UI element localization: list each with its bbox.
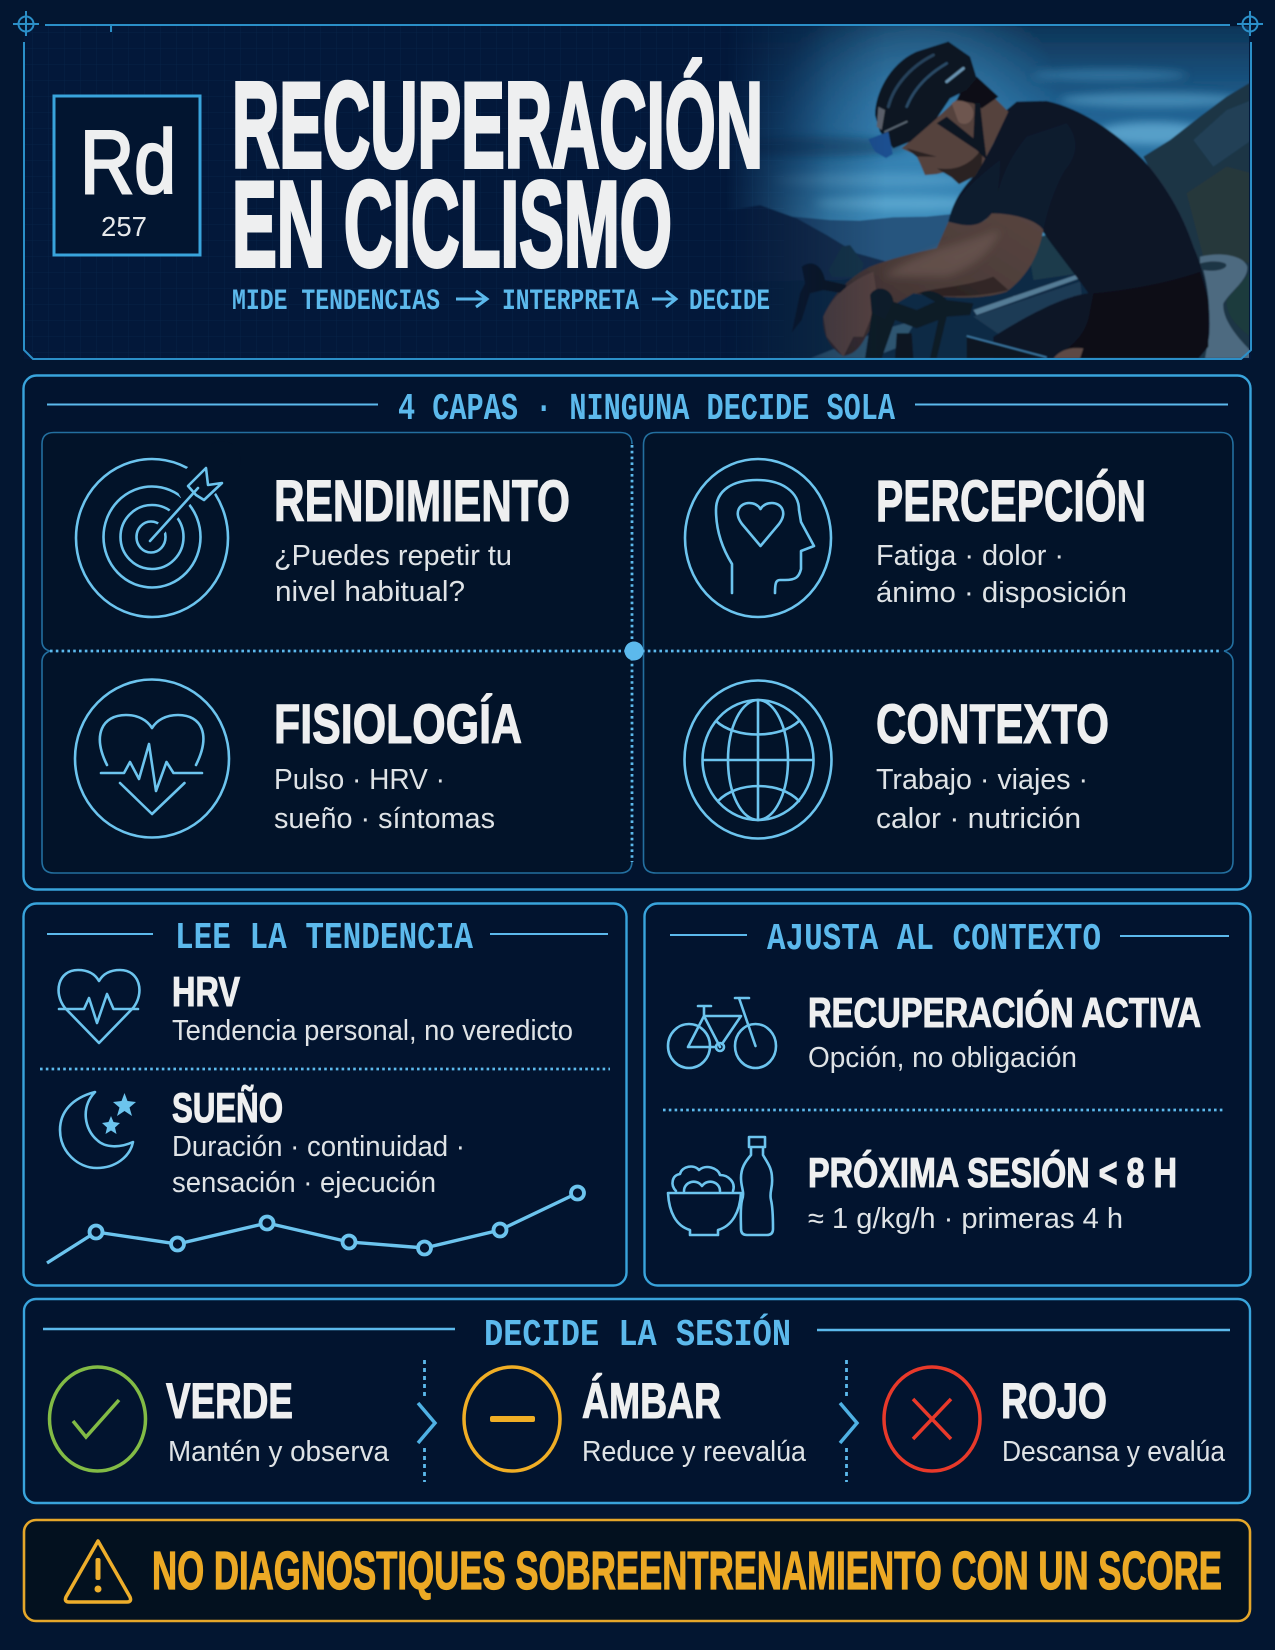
text: rendimiento: ¿Puedes repetir tu — [274, 540, 512, 572]
center node — [624, 642, 644, 660]
element badge — [54, 96, 200, 255]
text: fisiologia: Pulso · HRV · — [274, 764, 445, 796]
straps — [937, 103, 987, 160]
text: recuperacion activa — [808, 988, 1201, 1074]
heading: decide la sesion: DECIDE LA SESIÓN — [484, 1312, 791, 1357]
subtitle flow: MIDE TENDENCIAS — [232, 285, 440, 319]
status: verde: VERDE — [166, 1373, 293, 1429]
text: rendimiento: RENDIMIENTO — [274, 469, 570, 534]
text: proxima sesion — [808, 1148, 1177, 1235]
status: verde — [50, 1367, 390, 1471]
far mountains — [794, 214, 952, 262]
icon: target — [76, 459, 228, 617]
subtitle flow: INTERPRETA — [502, 285, 639, 319]
status: rojo: Descansa y evalúa — [1002, 1436, 1226, 1468]
icon: globe — [684, 680, 832, 838]
torso and shorts — [948, 101, 1210, 358]
text: contexto — [876, 692, 1109, 835]
icon: bicycle — [668, 998, 776, 1068]
heading: lee la tendencia: LEE LA TENDENCIA — [175, 917, 473, 960]
status: ambar: Reduce y reevalúa — [582, 1436, 807, 1468]
status: verde: Mantén y observa — [168, 1436, 390, 1468]
status: ambar: ÁMBAR — [582, 1373, 721, 1429]
hand — [823, 272, 877, 357]
text: percepcion: Fatiga · dolor · — [876, 540, 1064, 572]
text: percepcion: PERCEPCIÓN — [876, 469, 1146, 534]
status: rojo: ROJO — [1001, 1373, 1107, 1429]
card: fisiologia — [42, 651, 632, 873]
text: rendimiento — [274, 469, 570, 608]
icon: food and bottle — [668, 1137, 773, 1235]
right mountain — [1143, 82, 1252, 358]
icon: heart pulse — [75, 680, 229, 838]
header frame — [24, 25, 1251, 359]
arrow: verde to ambar — [418, 1360, 435, 1482]
text: recuperacion activa: Opción, no obligación — [808, 1042, 1077, 1074]
panel: 4 capas — [24, 376, 1250, 890]
neck and face — [902, 97, 1008, 184]
helmet — [875, 42, 977, 148]
icon: moon and stars — [60, 1092, 136, 1168]
guard rail and road — [973, 275, 1079, 315]
panel: ajusta al contexto — [644, 904, 1250, 1286]
text: hrv: HRV — [172, 968, 240, 1015]
arrow: ambar to rojo — [840, 1360, 857, 1482]
card: percepcion — [644, 432, 1233, 651]
crosshair marks — [13, 11, 1263, 36]
text: percepcion: ánimo · disposición — [876, 577, 1127, 609]
heading: ajusta al contexto: AJUSTA AL CONTEXTO — [767, 918, 1101, 961]
trees — [845, 244, 855, 252]
text: contexto: CONTEXTO — [876, 692, 1109, 755]
text: contexto: calor · nutrición — [876, 803, 1081, 835]
card: rendimiento — [42, 432, 632, 651]
text: sueno — [172, 1084, 465, 1199]
ear — [952, 101, 973, 124]
icon: small heart pulse — [59, 970, 139, 1043]
text: hrv — [172, 968, 573, 1047]
title — [232, 57, 763, 292]
header panel — [13, 0, 1263, 359]
title: EN CICLISMO — [232, 156, 672, 292]
text: proxima sesion: PRÓXIMA SESIÓN < 8 H — [808, 1148, 1177, 1196]
handlebars — [792, 263, 847, 333]
text: percepcion — [876, 469, 1146, 609]
text: sueno: SUEÑO — [172, 1084, 283, 1131]
subtitle flow: DECIDE — [689, 285, 770, 319]
text: rendimiento: nivel habitual? — [275, 576, 465, 608]
arm — [823, 213, 1043, 356]
text: fisiologia: sueño · síntomas — [274, 803, 495, 835]
title: RECUPERACIÓN — [232, 57, 763, 193]
sunglasses — [868, 132, 893, 158]
status: rojo — [884, 1367, 1226, 1471]
card: contexto — [644, 651, 1233, 873]
status: ambar — [464, 1367, 807, 1471]
icon: head with heart — [685, 459, 831, 617]
warning banner — [24, 1520, 1250, 1621]
panel: decide la sesion — [24, 1299, 1250, 1503]
text: hrv: Tendencia personal, no veredicto — [172, 1015, 573, 1047]
icon: warning triangle — [65, 1541, 131, 1602]
text: fisiologia: FISIOLOGÍA — [274, 692, 522, 755]
subtitle flow — [232, 285, 770, 319]
road right — [1200, 254, 1250, 358]
text: sueno: Duración · continuidad · — [172, 1131, 465, 1163]
hair — [957, 77, 998, 108]
text: sueno: sensación · ejecución — [172, 1167, 436, 1199]
text: contexto: Trabajo · viajes · — [876, 764, 1088, 796]
line chart: trend — [47, 1186, 584, 1263]
text: fisiologia — [274, 692, 522, 835]
element badge: 257 — [101, 211, 147, 242]
panel: lee la tendencia — [24, 904, 626, 1286]
element badge: Rd — [80, 113, 176, 213]
cyclist photo — [735, 26, 1249, 358]
heading: 4 capas: 4 CAPAS · NINGUNA DECIDE SOLA — [398, 388, 895, 431]
text: proxima sesion: ≈ 1 g/kg/h · primeras 4 h — [808, 1203, 1123, 1235]
